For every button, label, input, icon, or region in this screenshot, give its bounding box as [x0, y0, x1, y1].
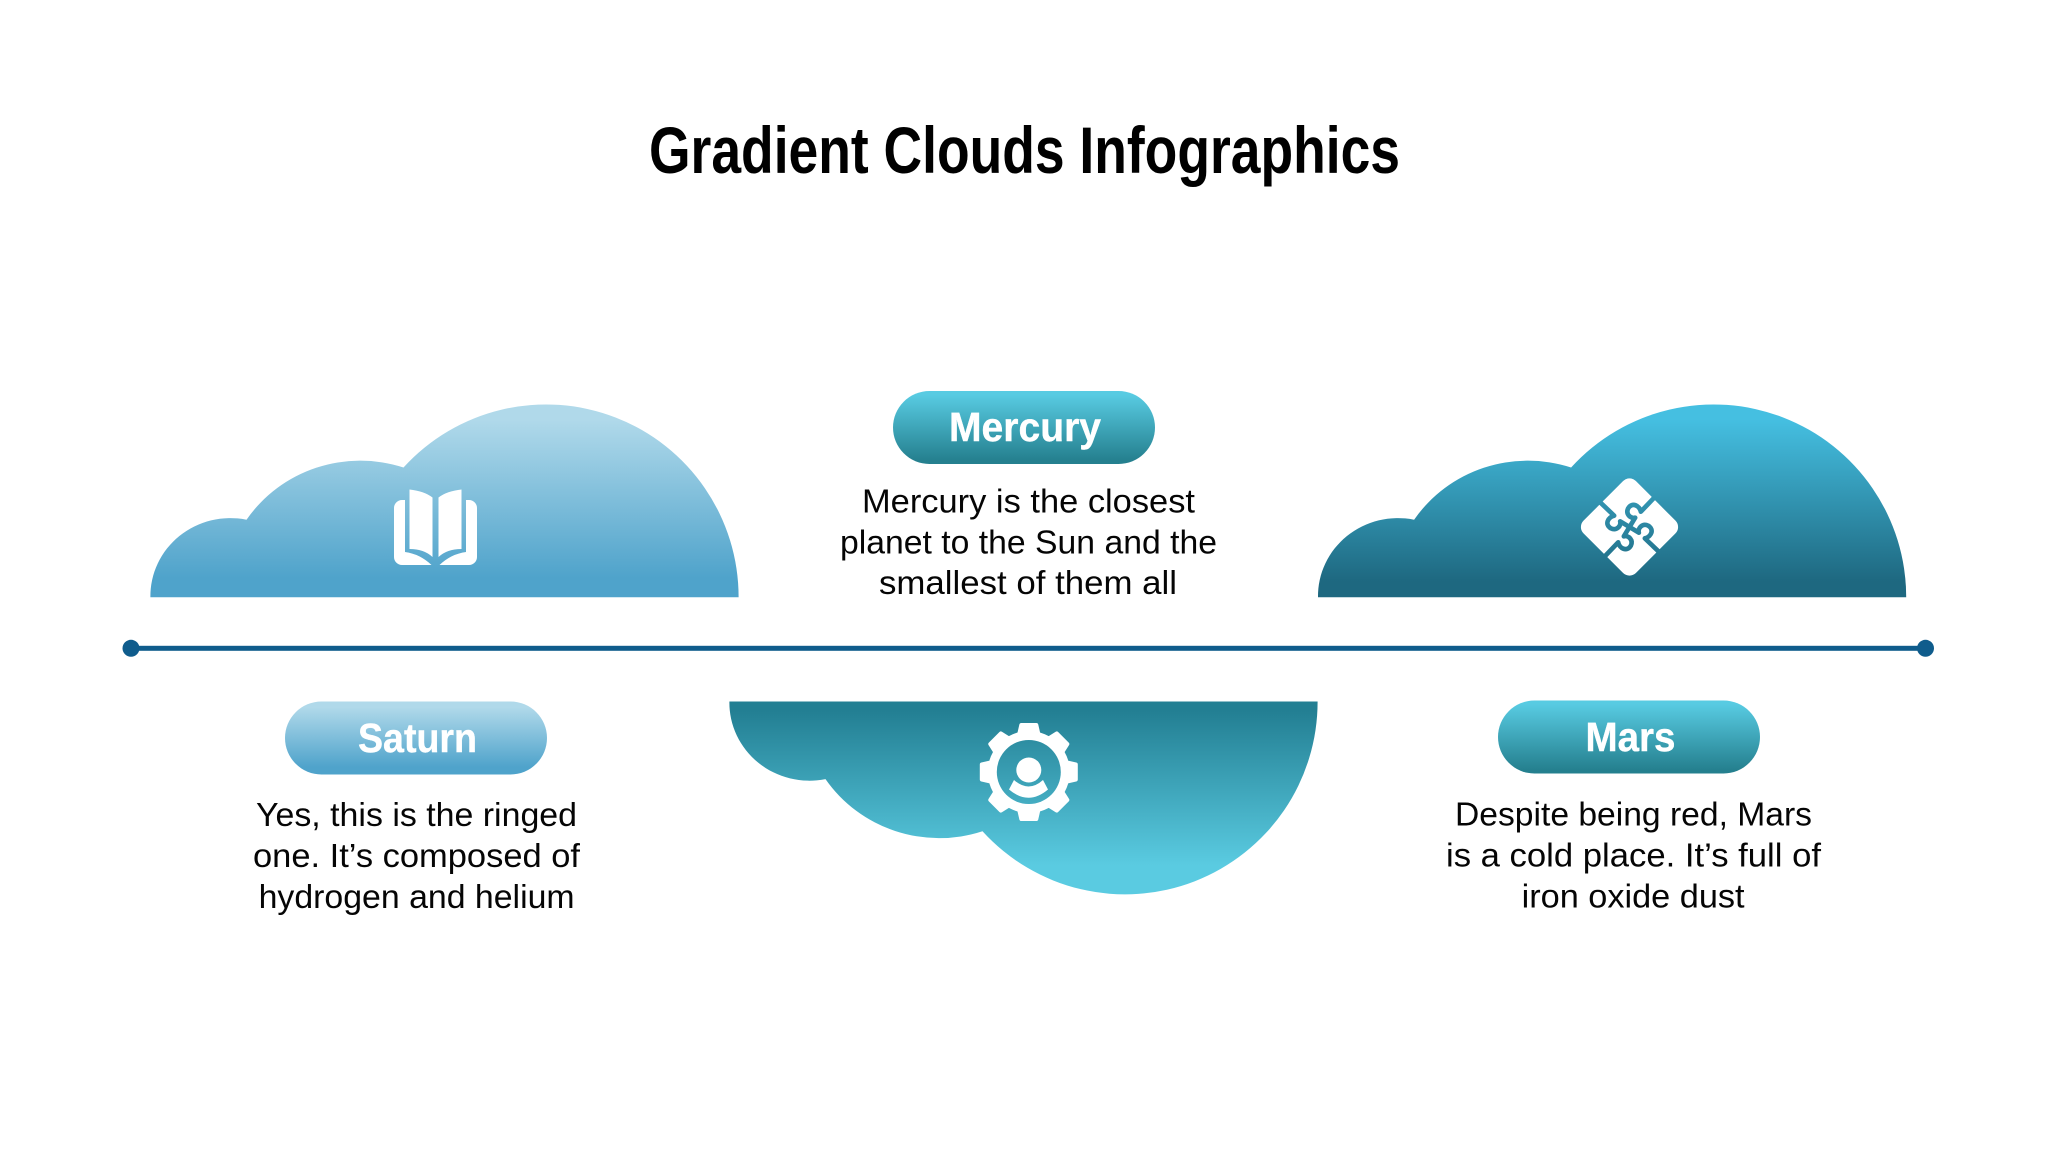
text: Mars description: iron oxide dust — [1522, 878, 1745, 914]
text: Saturn description: Yes, this is the ringed — [256, 796, 577, 833]
text: Mercury description: Mercury is the closest — [862, 482, 1195, 520]
icon: puzzle — [1580, 478, 1678, 576]
label pill: Mars: Mars — [1586, 714, 1676, 760]
cloud: Mars — [1318, 404, 1906, 597]
cloud: Saturn — [150, 404, 739, 597]
title: Gradient Clouds Infographics — [649, 113, 1400, 187]
text: Mercury description: smallest of them all — [879, 564, 1177, 601]
timeline — [122, 640, 1934, 657]
text: Saturn description: one. It’s composed of — [253, 837, 581, 874]
text: Mercury description: planet to the Sun and the — [840, 524, 1217, 560]
panel: Mercury — [729, 391, 1318, 894]
icon: open book — [394, 490, 477, 565]
label pill: Mercury: Mercury — [949, 404, 1101, 450]
label pill: Saturn: Saturn — [358, 715, 477, 761]
cloud: Mercury — [729, 702, 1318, 894]
text: Mars description: is a cold place. It’s full of — [1446, 836, 1822, 874]
label pill: Saturn — [285, 702, 547, 774]
text: Mars description — [1446, 796, 1822, 914]
text: Saturn description — [253, 796, 581, 915]
panel: Mars — [1318, 404, 1906, 914]
text: Mercury description — [840, 482, 1217, 601]
label pill: Mercury — [893, 391, 1155, 464]
text: Saturn description: hydrogen and helium — [259, 878, 575, 915]
text: Mars description: Despite being red, Mars — [1455, 796, 1812, 832]
icon: gear with person — [980, 723, 1078, 821]
label pill: Mars — [1498, 700, 1760, 774]
panel: Saturn — [150, 404, 739, 915]
